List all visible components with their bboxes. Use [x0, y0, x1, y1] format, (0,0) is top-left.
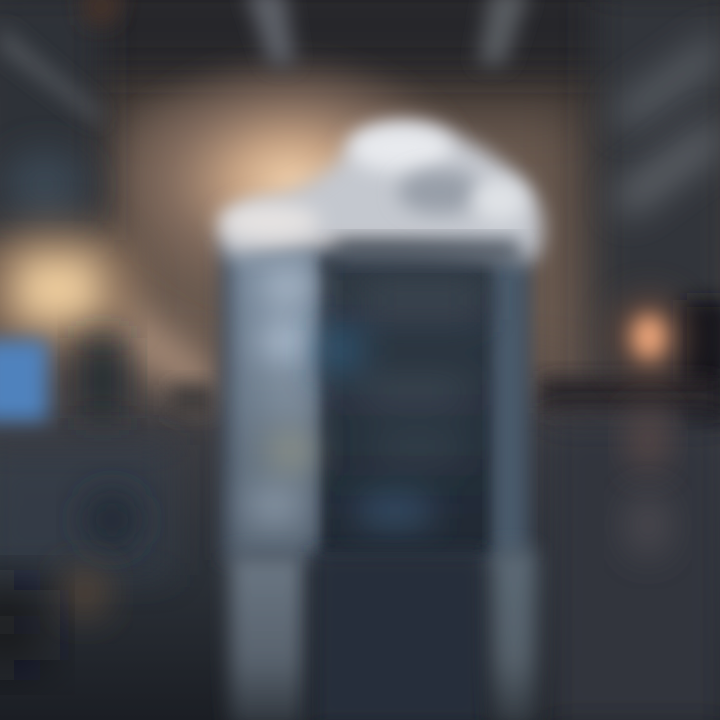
tower front panel — [322, 255, 494, 555]
right floor reflections — [545, 408, 720, 720]
cloud on top of tower — [220, 124, 543, 262]
warm backlight glow — [100, 50, 480, 310]
left floor objects — [0, 445, 170, 660]
left warm window light — [0, 220, 140, 350]
front panel details — [320, 280, 480, 524]
floor reflection of tower — [230, 550, 536, 720]
right shelving — [540, 0, 720, 430]
right orange lamp — [613, 297, 685, 377]
left shelving — [0, 0, 215, 410]
tower left side panel — [230, 245, 318, 555]
left blue monitor — [0, 338, 215, 422]
ceiling lights — [80, 0, 530, 65]
tower right edge — [496, 255, 524, 555]
side panel highlights — [250, 270, 312, 522]
server tower — [222, 240, 527, 560]
tower shadow base — [222, 240, 527, 560]
